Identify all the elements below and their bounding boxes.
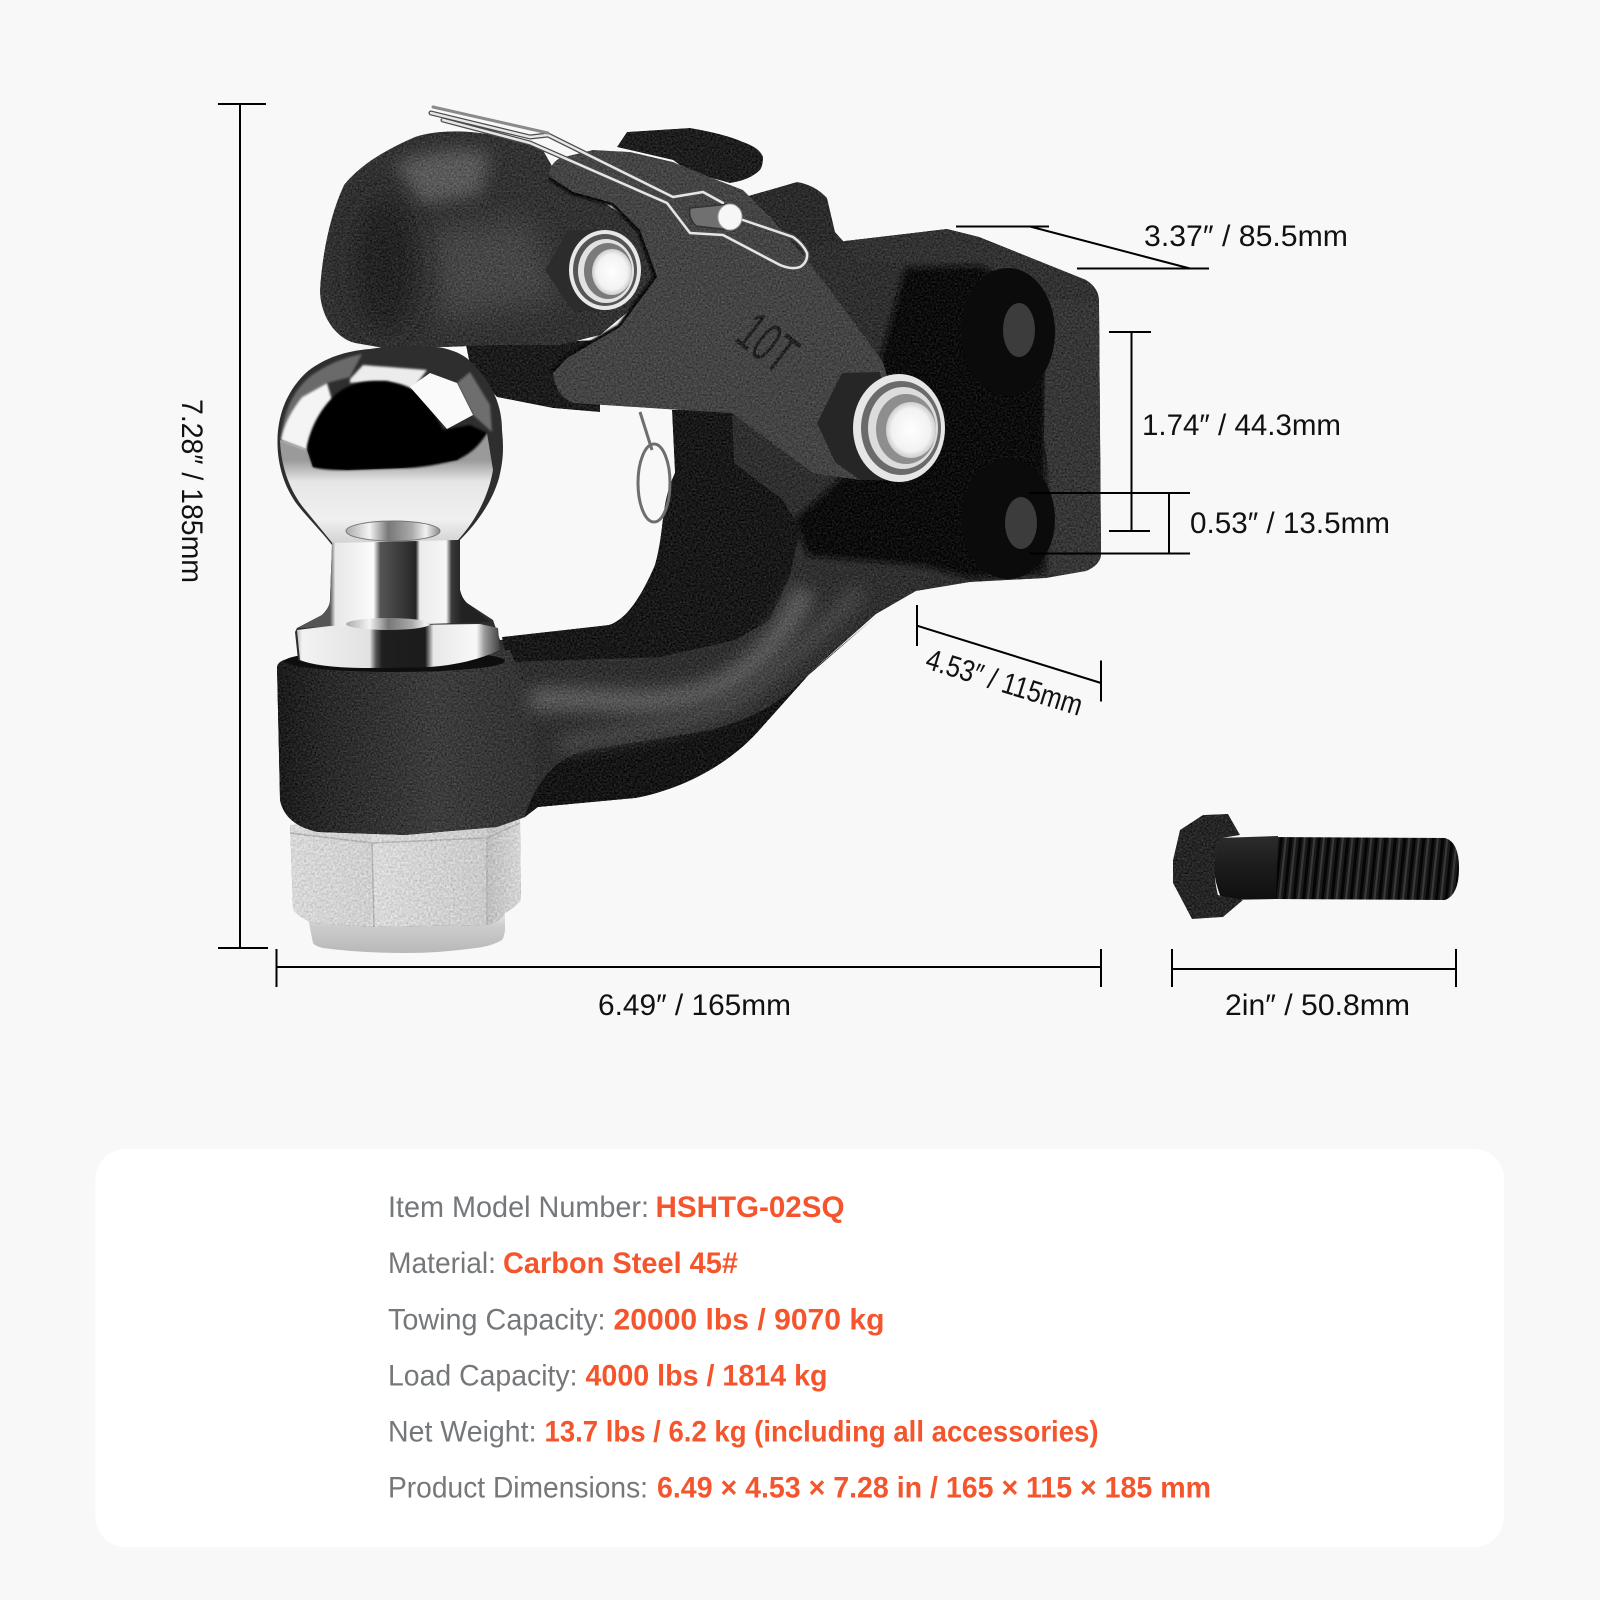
cup rim <box>285 650 505 672</box>
pintle hitch product <box>277 107 1101 953</box>
lower boss <box>961 459 1055 579</box>
dimension: 4.53 width <box>917 605 1101 723</box>
dimension: length 6.49 <box>276 949 1101 1022</box>
cap <box>308 910 505 953</box>
card background <box>96 1149 1504 1547</box>
grey upper right <box>457 372 492 432</box>
collar highlight <box>346 521 440 541</box>
row: towing capacity: Towing Capacity: <box>388 1304 606 1336</box>
bottom nut <box>290 815 521 953</box>
plate top surface <box>845 229 1099 301</box>
row: model number: Item Model Number: <box>388 1191 649 1224</box>
white wedge <box>410 373 473 429</box>
row: product dimensions: 6.49 × 4.53 × 7.28 in / 165 × 115 × 185 mm <box>657 1472 1211 1504</box>
plate edge shadow <box>550 177 657 373</box>
clevis pin <box>690 204 730 230</box>
chrome ball <box>277 346 503 668</box>
upper reflection strip <box>350 365 427 390</box>
arm highlights <box>530 590 805 702</box>
row: material: Material: <box>388 1247 496 1280</box>
dark chrome silhouette <box>277 346 503 668</box>
bolt hex head <box>1173 814 1243 919</box>
upper bolt and nut <box>545 230 641 312</box>
lower bolt and nut <box>817 372 945 482</box>
hex base <box>297 624 500 668</box>
accessory bolt <box>1173 814 1459 919</box>
cast iron body <box>277 128 1101 835</box>
row: model number <box>388 1191 844 1224</box>
row: product dimensions: Product Dimensions: <box>388 1472 648 1504</box>
black reflection <box>307 381 487 470</box>
dimension: height 7.28 <box>175 104 268 948</box>
row: towing capacity: 20000 lbs / 9070 kg <box>614 1304 884 1336</box>
hairpin clip <box>431 107 807 268</box>
main body silhouette <box>277 229 1101 835</box>
right flange <box>1044 298 1101 576</box>
jaw shading <box>395 150 490 205</box>
row: material: Carbon Steel 45# <box>503 1247 738 1280</box>
hex nut <box>290 815 521 927</box>
wire highlight <box>431 113 807 268</box>
bolt shank <box>1214 836 1278 900</box>
row: load capacity <box>388 1360 828 1392</box>
dimension: bolt 2in <box>1172 949 1456 1022</box>
row: load capacity: 4000 lbs / 1814 kg <box>586 1360 828 1392</box>
dimension: 1.74 hole spacing <box>1109 332 1341 531</box>
embossed 10T: 10T <box>726 300 810 385</box>
row: model number: HSHTG-02SQ <box>656 1191 844 1224</box>
dimension: 4.53 width: 4.53″ / 115mm <box>922 643 1086 723</box>
white left band <box>281 383 332 450</box>
grey shoulder <box>281 354 362 440</box>
safety chain ring <box>638 412 670 522</box>
rear bump <box>735 182 860 290</box>
plate recess <box>794 266 1046 578</box>
bolt thread <box>1270 837 1459 900</box>
row: net weight: 13.7 lbs / 6.2 kg (including all accessories) <box>544 1416 1098 1448</box>
wire outline <box>431 113 807 268</box>
dimension: height 7.28: 7.28″ / 185mm <box>175 399 208 583</box>
arm plate <box>550 150 905 480</box>
lever handle <box>617 128 763 183</box>
upper strand <box>433 107 548 133</box>
dimension: 0.53 hole diameter: 0.53″ / 13.5mm <box>1190 507 1390 540</box>
row: product dimensions <box>388 1472 1211 1504</box>
dimension: 3.37 plate depth <box>956 220 1348 268</box>
row: load capacity: Load Capacity: <box>388 1360 578 1392</box>
dimension: 1.74 hole spacing: 1.74″ / 44.3mm <box>1142 409 1341 442</box>
jaw dome <box>320 131 660 349</box>
dimension: 3.37 plate depth: 3.37″ / 85.5mm <box>1144 220 1348 253</box>
specification card <box>96 1149 1504 1547</box>
row: net weight: Net Weight: <box>388 1416 536 1448</box>
row: towing capacity <box>388 1304 884 1336</box>
upper boss <box>961 268 1055 396</box>
neck and flare <box>298 540 490 628</box>
cup cylinder <box>277 650 538 835</box>
lower collar <box>346 618 430 630</box>
row: material <box>388 1247 738 1280</box>
dimension: bolt 2in: 2in″ / 50.8mm <box>1225 989 1410 1022</box>
dimension: 0.53 hole diameter <box>1029 493 1390 554</box>
under jaw <box>466 340 600 412</box>
lower sphere highlight <box>280 433 493 545</box>
arm underside <box>525 613 880 817</box>
rear plate mounting holes <box>961 268 1055 579</box>
dimension: length 6.49: 6.49″ / 165mm <box>598 989 791 1022</box>
dark column <box>502 410 800 662</box>
